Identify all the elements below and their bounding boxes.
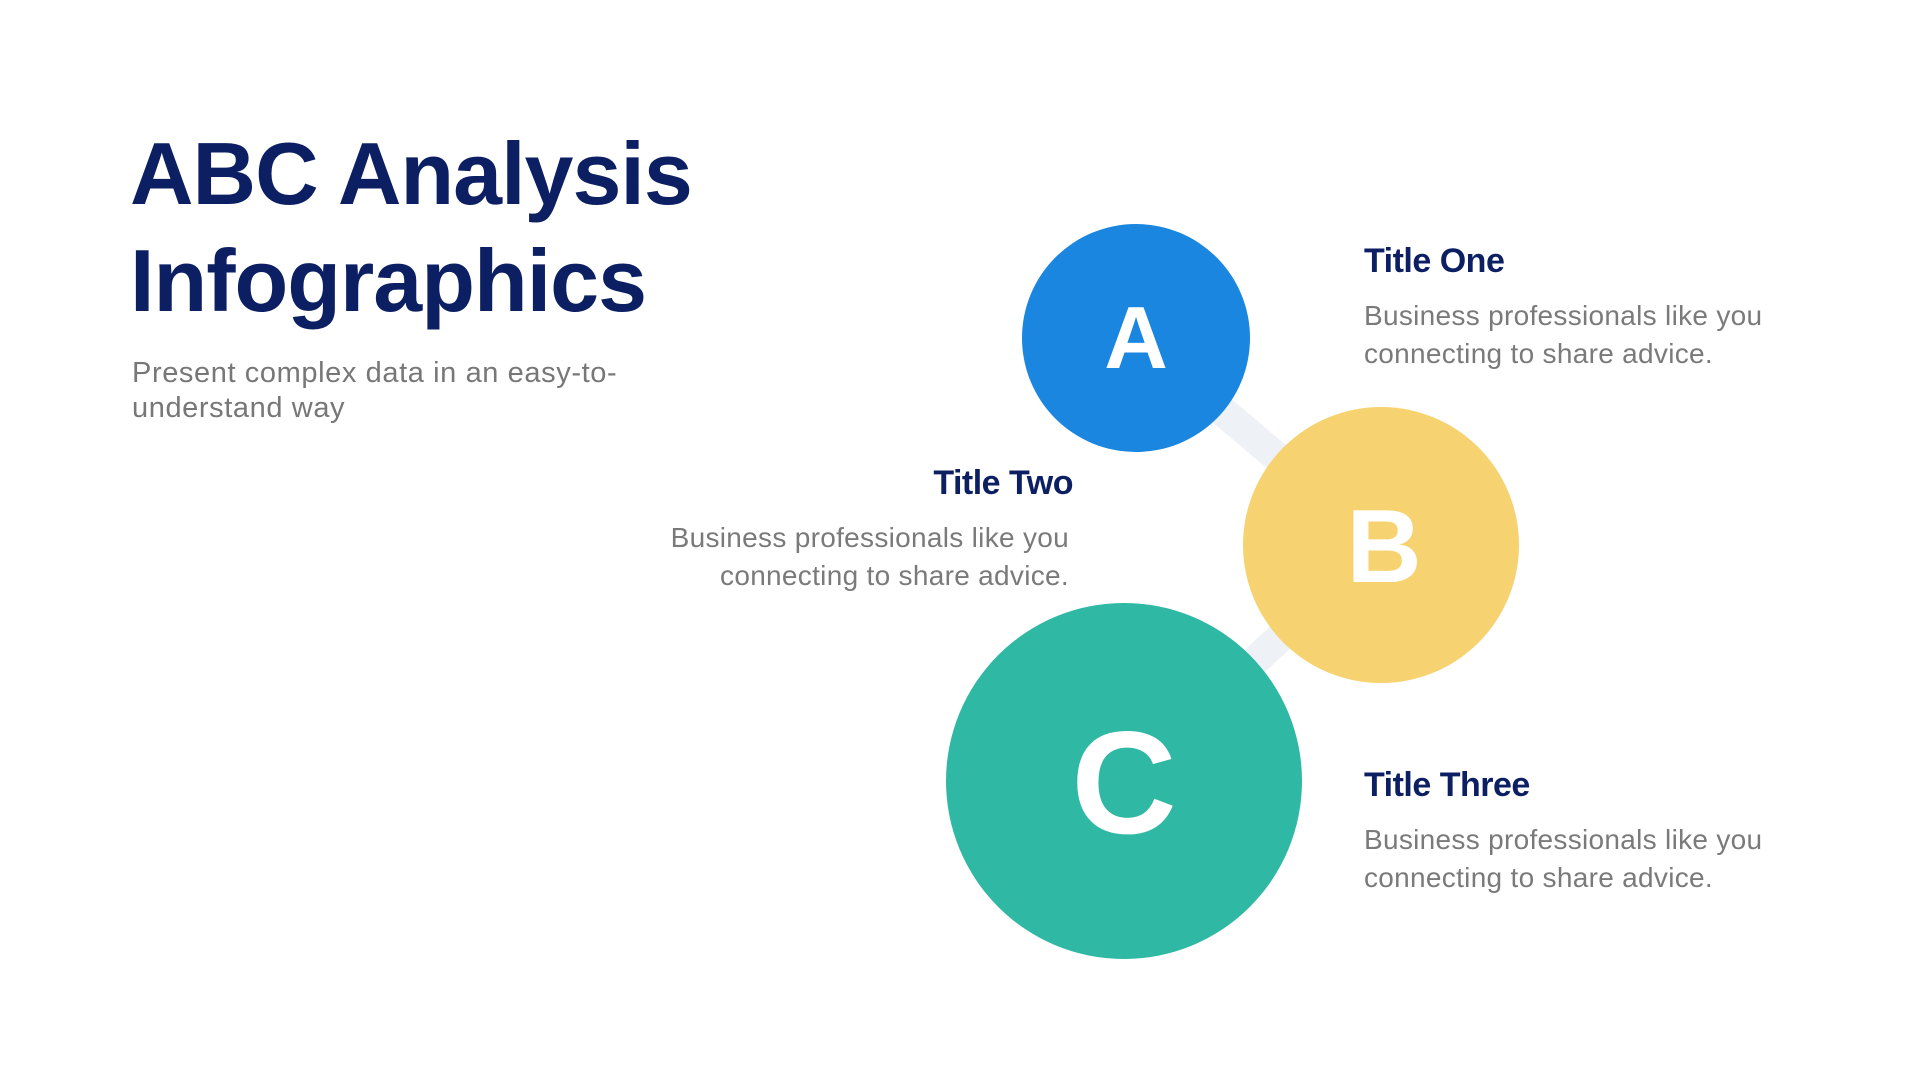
text block: Title Two: Business professionals like you [671,522,1069,553]
title: Infographics [130,231,646,330]
subtitle: understand way [132,392,345,424]
text block: Title Two: Title Two [933,464,1073,502]
text block: Title One: connecting to share advice. [1364,338,1713,369]
text block: Title One [1364,242,1762,369]
text block: Title Two: connecting to share advice. [720,560,1069,591]
circle B: B [1346,489,1422,605]
subtitle: Present complex data in an easy-to- [132,357,617,389]
text block: Title Three [1364,766,1762,893]
circle C [946,603,1302,959]
circle C: C [1071,701,1177,864]
circle A [1022,224,1250,452]
subtitle [132,357,617,424]
text block: Title One: Title One [1364,242,1504,280]
circle A: A [1104,288,1168,387]
circle B [1243,407,1519,683]
connector B-C [1124,545,1381,781]
text block: Title One: Business professionals like you [1364,300,1762,331]
title [130,124,692,330]
connector A-B [1136,338,1381,545]
title: ABC Analysis [130,124,692,223]
text block: Title Three: Title Three [1364,766,1530,804]
text block: Title Three: Business professionals like you [1364,824,1762,855]
text block: Title Three: connecting to share advice. [1364,862,1713,893]
text block: Title Two [671,464,1073,591]
